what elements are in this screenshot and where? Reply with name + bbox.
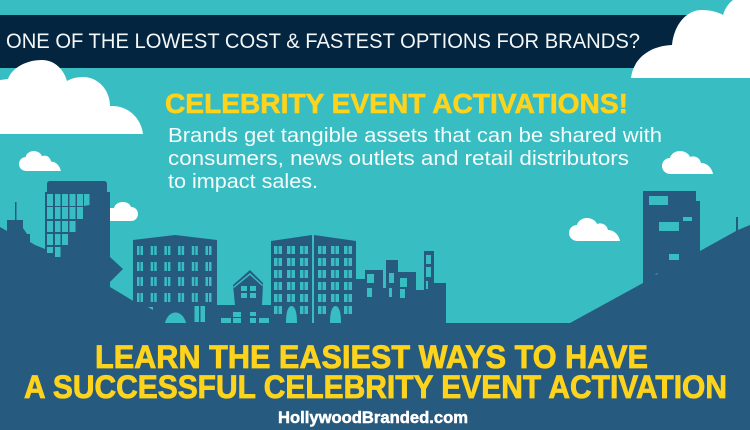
bottom headline: LEARN THE EASIEST WAYS TO HAVE [95, 339, 648, 375]
windows: tall tower [47, 194, 90, 257]
city skyline [0, 181, 750, 430]
website: HollywoodBranded.com [278, 408, 468, 427]
top banner [0, 15, 690, 68]
banner text: ONE OF THE LOWEST COST & FASTEST OPTIONS FOR BRANDS? [6, 30, 640, 53]
building: left office block [133, 235, 217, 325]
ground and left hillside [0, 181, 750, 430]
cloud: beside tower [105, 202, 138, 221]
body text: consumers, news outlets and retail distributors [168, 148, 629, 170]
cloud: small right upper [662, 151, 713, 174]
cloud: large left [0, 60, 143, 134]
body text: Brands get tangible assets that can be shared with [168, 125, 662, 147]
windows: right tower [649, 196, 692, 275]
cloud: small left [19, 151, 61, 171]
building gap line [312, 235, 314, 323]
cloud: top right [631, 0, 750, 78]
bottom headline [24, 339, 727, 405]
windows: left office block [137, 246, 212, 323]
house [221, 273, 269, 323]
windows: twin tower [274, 246, 352, 323]
window dividers: twin tower [278, 246, 348, 314]
cloud: small right lower [569, 218, 620, 241]
windows: small blocks [367, 255, 431, 298]
body text: to impact sales. [168, 171, 318, 193]
body text [168, 125, 662, 193]
heading: CELEBRITY EVENT ACTIVATIONS! [165, 88, 628, 119]
